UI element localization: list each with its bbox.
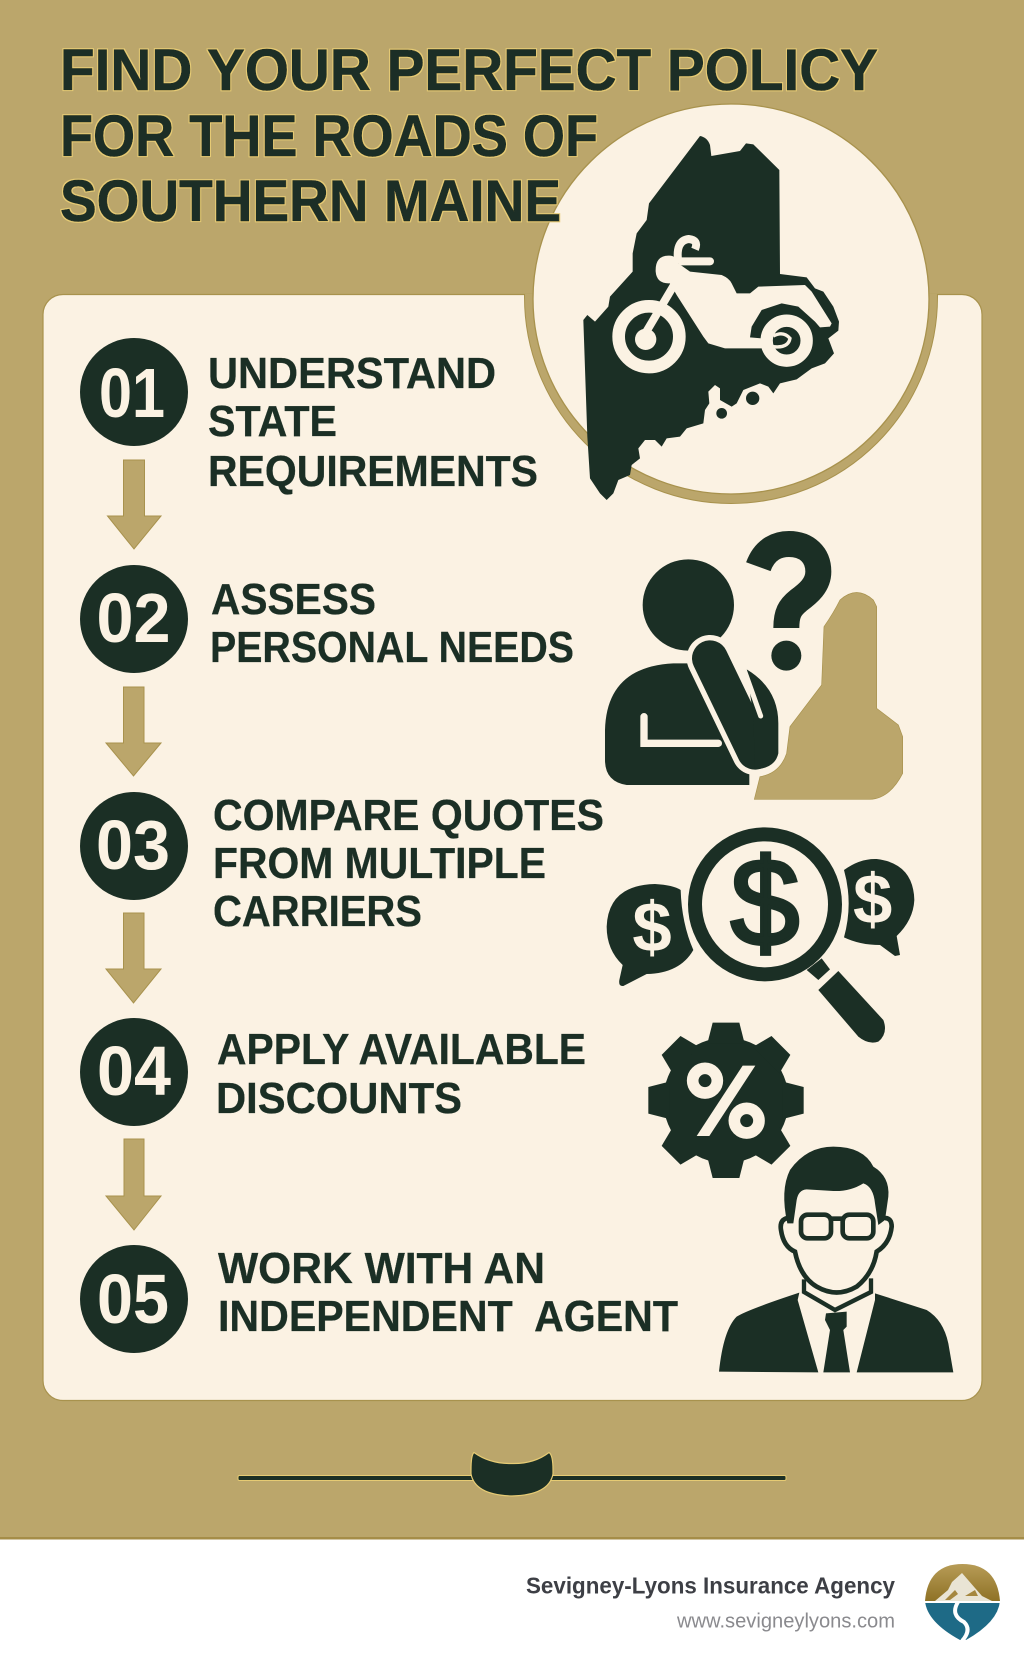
icon: gear with percent [648, 1023, 804, 1178]
panel: steps card [43, 294, 982, 1400]
step 03 text: CARRIERS [213, 887, 422, 936]
number badge 01 [80, 338, 188, 446]
step 05 text [218, 1244, 678, 1341]
logo: mountain and river [925, 1563, 1000, 1643]
title: FOR THE ROADS OF [60, 104, 598, 169]
arrow 3 to 4 [106, 913, 161, 1003]
footer: website: www.sevigneylyons.com [676, 1610, 895, 1632]
number badge 04 [80, 1018, 188, 1126]
step 03 text: FROM MULTIPLE [213, 839, 546, 888]
icon: magnifier with dollar and speech bubbles: $ [731, 834, 799, 972]
arrow 1 to 2 [108, 460, 161, 549]
title: FIND YOUR PERFECT POLICY [60, 38, 878, 103]
step 05 text: INDEPENDENT AGENT [218, 1292, 678, 1341]
number badge 05 [80, 1245, 188, 1353]
arrow 4 to 5 [106, 1139, 161, 1230]
step 01 [80, 338, 538, 496]
step 03 text [213, 791, 604, 936]
step 05 [80, 1244, 678, 1353]
step 01 text: UNDERSTAND [208, 349, 496, 398]
step 05 text: WORK WITH AN [218, 1244, 545, 1293]
step 04 text: DISCOUNTS [216, 1074, 462, 1123]
icon: thinking person with New Hampshire shape [605, 544, 903, 799]
step 02 text [210, 575, 574, 672]
number badge 02 [80, 565, 188, 673]
title [60, 38, 878, 234]
number badge 02: 02 [96, 579, 170, 657]
number badge 01: 01 [99, 354, 165, 432]
icon: magnifier with dollar and speech bubbles [607, 834, 914, 1043]
divider with road ornament [238, 1452, 786, 1496]
step 04 text: APPLY AVAILABLE [217, 1025, 586, 1074]
number badge 03: 03 [96, 806, 170, 884]
step 01 text: STATE [208, 397, 337, 446]
step 04 text [216, 1025, 586, 1123]
icon: magnifier with dollar and speech bubbles: $ [632, 887, 672, 966]
step 03 text: COMPARE QUOTES [213, 791, 604, 840]
footer: agency name: Sevigney-Lyons Insurance Agency [526, 1572, 895, 1598]
number badge 03 [80, 792, 188, 900]
icon: magnifier with dollar and speech bubbles: $ [853, 860, 892, 939]
number badge 04: 04 [97, 1032, 171, 1110]
step 01 text: REQUIREMENTS [208, 447, 538, 496]
step 01 text [208, 349, 538, 496]
title: SOUTHERN MAINE [60, 169, 561, 234]
number badge 05: 05 [97, 1260, 169, 1338]
icon: independent agent [719, 1147, 953, 1372]
arrow 2 to 3 [106, 687, 161, 776]
step 02 text: PERSONAL NEEDS [210, 623, 574, 672]
step 03 [80, 791, 604, 936]
circle badge with Maine map [524, 90, 938, 504]
step 04 [80, 1018, 586, 1126]
icon: Maine map with motorcycle [583, 136, 839, 500]
step 02 [80, 565, 574, 673]
step 02 text: ASSESS [211, 575, 376, 624]
